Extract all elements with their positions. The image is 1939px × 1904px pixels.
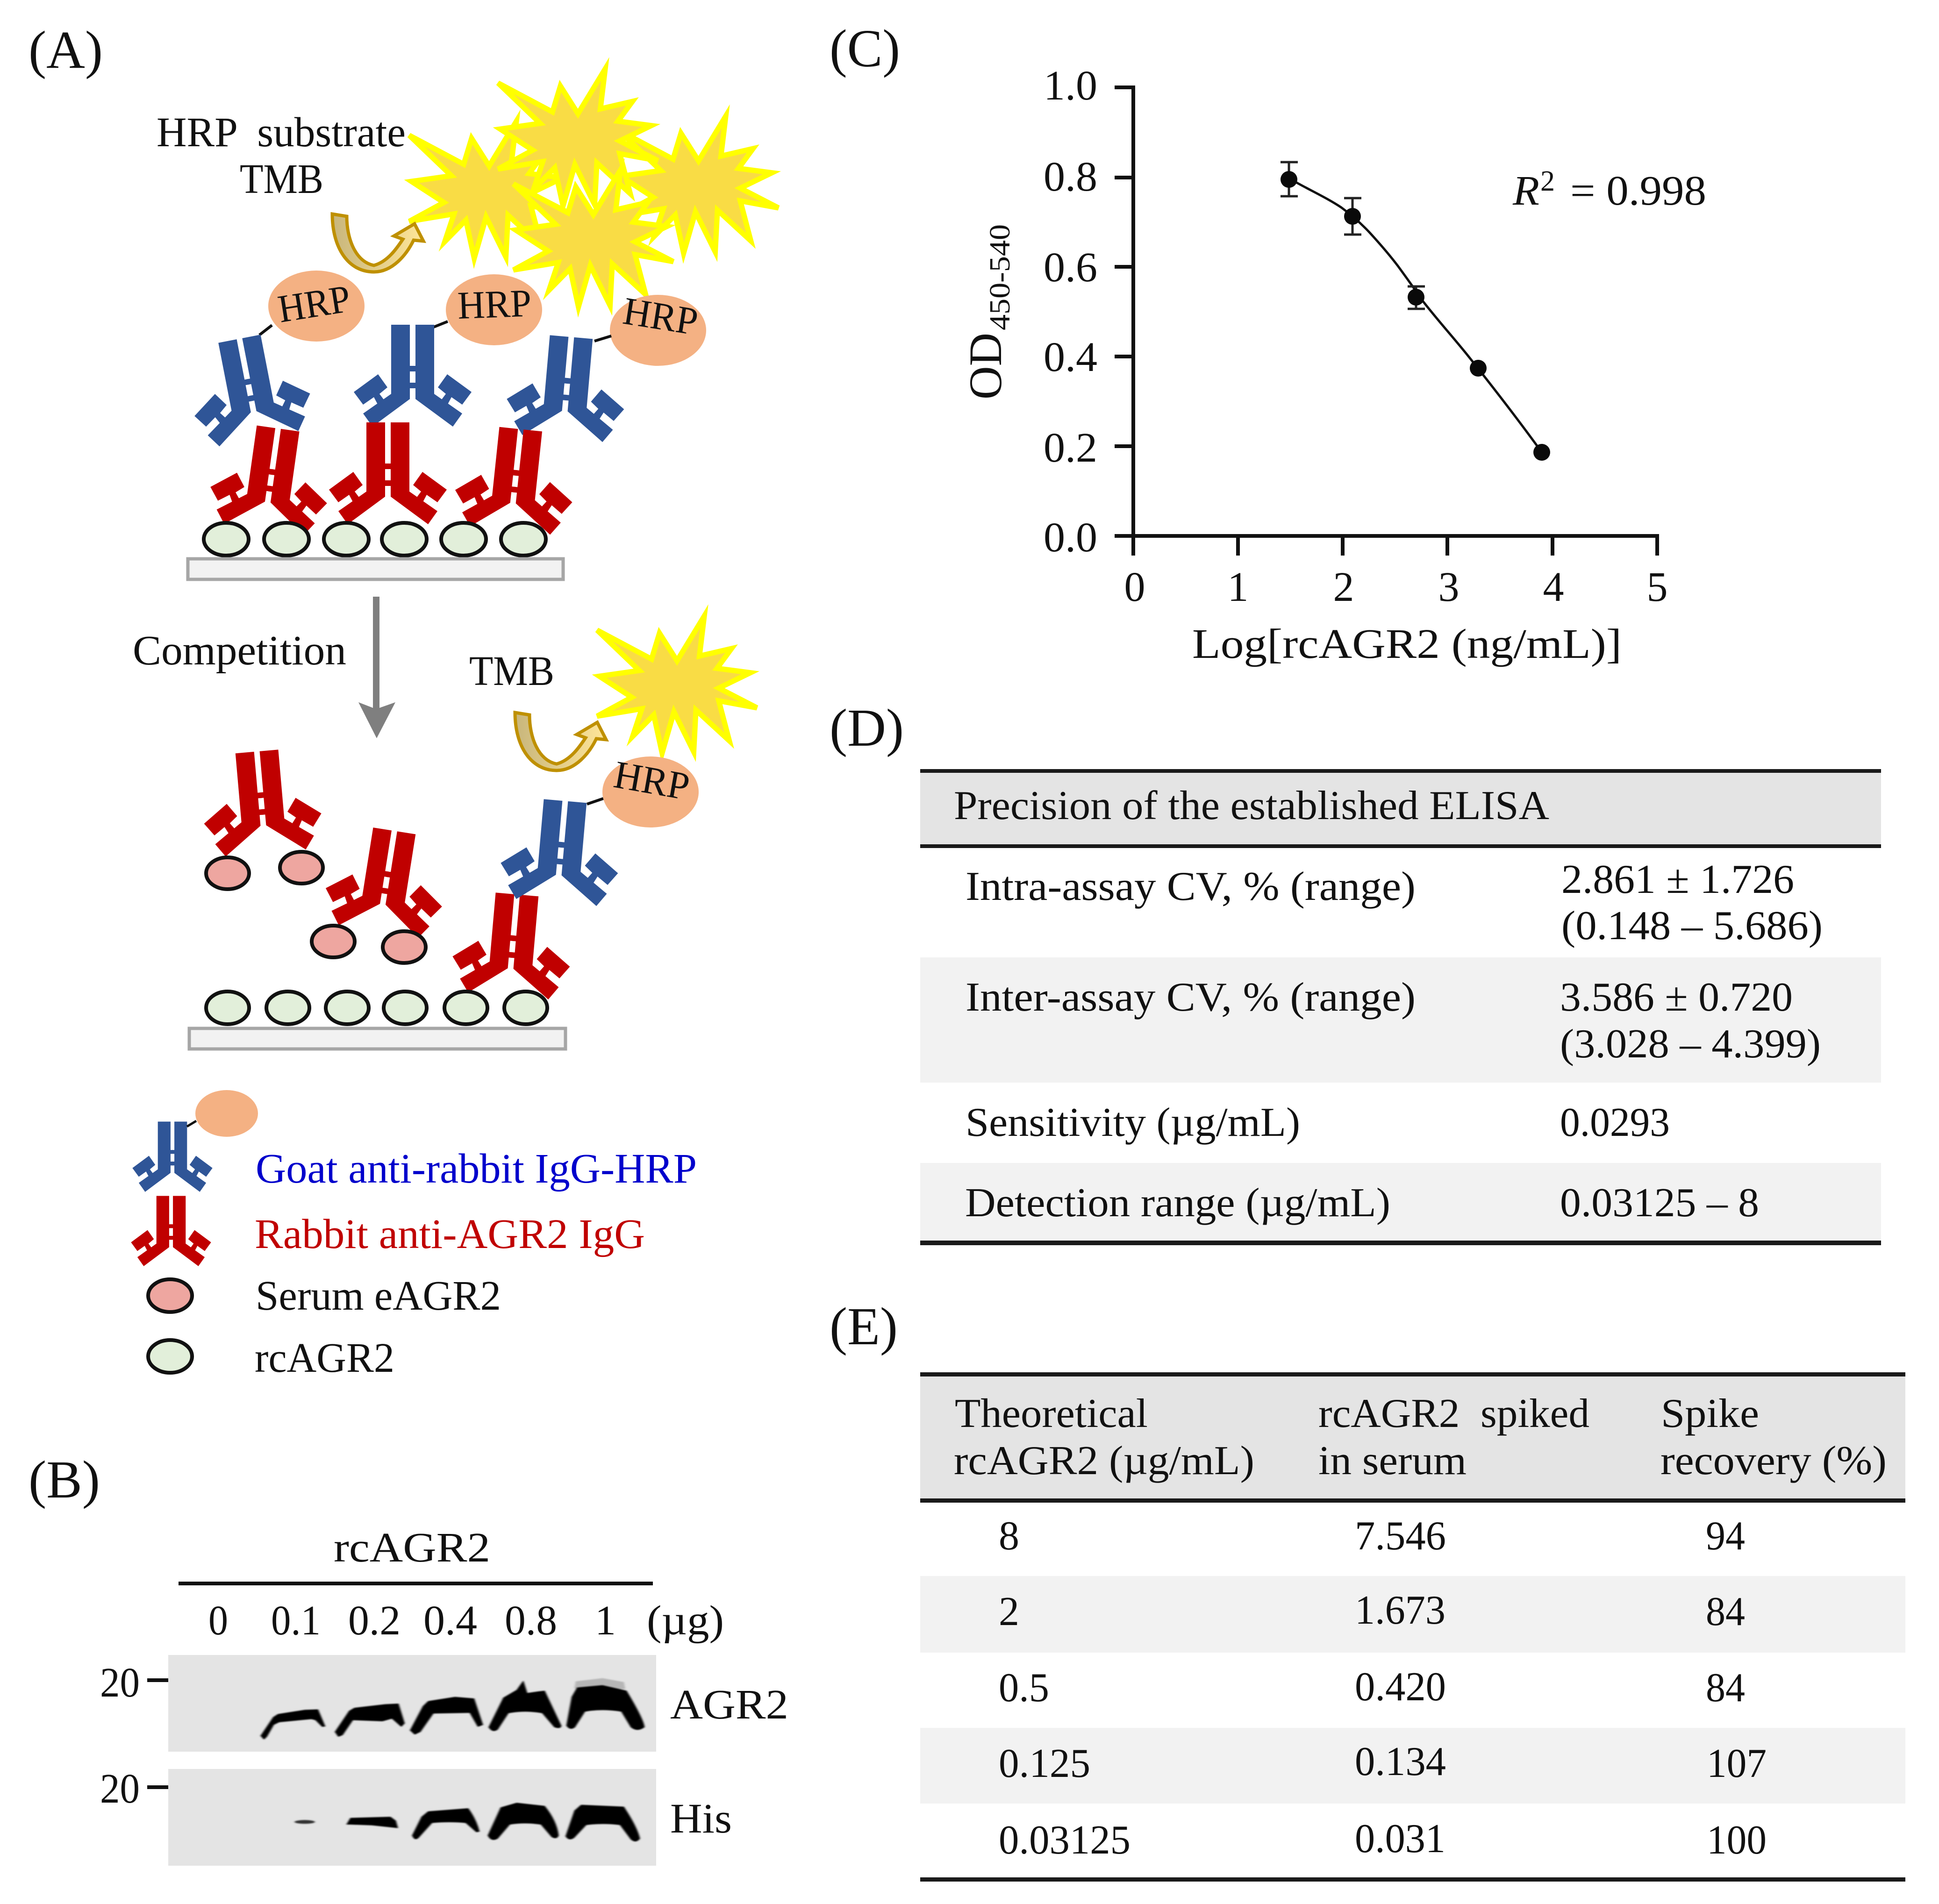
table backgrounds (920, 1375, 1905, 1804)
blot heading rcAGR2: rcAGR2 (334, 1525, 490, 1571)
row: inter-assay CV: Inter-assay CV, % (range) (966, 975, 1416, 1020)
row: inter-assay CV: (3.028 – 4.399) (1560, 1021, 1821, 1067)
R squared annotation (1512, 165, 1706, 214)
top assay: blue goat anti-rabbit antibodies (182, 325, 630, 450)
panel label C: (C) (830, 19, 900, 78)
legend (131, 1090, 697, 1381)
row: 8 (999, 1513, 1745, 1559)
fitted curve (1289, 179, 1542, 452)
header: spike recovery (1660, 1391, 1887, 1483)
row: 0.5: 0.5 (999, 1665, 1049, 1711)
panel B: western blot (29, 1450, 788, 1866)
lane labels: 0.8 (505, 1597, 557, 1644)
legend text: serum eAGR2: Serum eAGR2 (256, 1273, 501, 1319)
top assay: HRP conjugates: HRP (620, 289, 701, 344)
x-axis tick labels: 3 (1438, 564, 1459, 610)
y-axis tick labels: 0.2 (1044, 425, 1097, 471)
header: spike recovery: Spike (1661, 1391, 1759, 1436)
table rules (920, 769, 1881, 1245)
y-axis tick labels: 0.4 (1044, 334, 1097, 380)
row: intra-assay CV (966, 857, 1823, 948)
y-axis tick labels: 1.0 (1044, 63, 1097, 109)
y-axis title (959, 224, 1016, 399)
blot label His: His (670, 1796, 732, 1842)
panel label B: (B) (29, 1450, 100, 1509)
row: 0.125 (999, 1739, 1767, 1786)
row: inter-assay CV: 3.586 ± 0.720 (1560, 975, 1793, 1020)
bottom assay: coated rcAGR2 circles (206, 991, 547, 1024)
row: detection range (965, 1180, 1759, 1226)
R squared annotation: = 0.998 (1570, 168, 1706, 214)
bottom assay: blue antibody with HRP (498, 753, 699, 908)
lane labels: 0.4 (423, 1597, 477, 1644)
data points (1281, 171, 1550, 461)
label: second TMB: TMB (469, 648, 554, 694)
marker 20 lower (100, 1766, 168, 1812)
x-axis tick labels: 1 (1227, 564, 1249, 610)
lane labels: 0.1 (271, 1597, 321, 1644)
blot: His (168, 1769, 656, 1866)
row: detection range: Detection range (µg/mL) (965, 1180, 1390, 1226)
row: 0.03125 (999, 1816, 1767, 1863)
row: 8: 8 (999, 1513, 1019, 1559)
label: Competition: Competition (133, 628, 346, 674)
row: 0.5: 0.420 (1355, 1664, 1446, 1710)
lane labels: 0 (208, 1597, 228, 1644)
header: rcAGR2 spiked in serum: rcAGR2 spiked (1318, 1391, 1589, 1436)
y-axis title: 450-540 (984, 224, 1016, 330)
legend icon: goat antibody with HRP (132, 1090, 258, 1192)
table header: Precision of the established ELISA (954, 783, 1549, 828)
panel label A: (A) (29, 20, 103, 79)
panel label D: (D) (830, 698, 904, 757)
y-axis tick labels: 0.0 (1044, 514, 1097, 561)
row: 0.5 (999, 1664, 1745, 1711)
row: 0.03125: 100 (1707, 1818, 1767, 1863)
marker 20 lower: 20 (100, 1766, 140, 1812)
bottom assay: free antibodies bound to serum eAGR2 (198, 746, 576, 1001)
header: theoretical rcAGR2 (954, 1391, 1254, 1483)
header: spike recovery: recovery (%) (1660, 1438, 1887, 1483)
legend text: goat antibody: Goat anti-rabbit IgG-HRP (256, 1146, 697, 1192)
legend text: rabbit antibody: Rabbit anti-AGR2 IgG (255, 1211, 645, 1257)
bottom assay: blue antibody with HRP: HRP (611, 753, 693, 809)
R squared annotation: R (1512, 168, 1539, 214)
x-axis tick labels (1124, 564, 1667, 610)
R squared annotation: 2 (1540, 165, 1555, 197)
blot label AGR2: AGR2 (670, 1682, 788, 1728)
marker 20 upper: 20 (100, 1660, 140, 1706)
row: 0.125: 0.125 (999, 1741, 1090, 1786)
row: 0.03125: 0.031 (1355, 1816, 1445, 1861)
arrow: second substrate conversion (515, 713, 606, 770)
arrow: competition step (358, 597, 395, 738)
panel A: competitive ELISA schematic (29, 20, 779, 1381)
header: theoretical rcAGR2: Theoretical (955, 1391, 1148, 1436)
header: rcAGR2 spiked in serum (1318, 1391, 1589, 1483)
y-axis tick labels: 0.6 (1044, 244, 1097, 291)
top assay: HRP conjugates (259, 271, 706, 366)
panel label E: (E) (830, 1297, 898, 1356)
row: 0.125: 107 (1707, 1741, 1767, 1786)
table rules (920, 1372, 1905, 1882)
row: 8: 94 (1706, 1513, 1745, 1559)
bottom assay: plate surface (189, 1028, 565, 1049)
y-axis tick labels (1044, 63, 1097, 561)
row: 2: 84 (1706, 1589, 1745, 1634)
row: 2 (999, 1588, 1745, 1634)
row: inter-assay CV (966, 975, 1821, 1067)
panel D: precision table (830, 698, 1881, 1245)
panel E: spike recovery table (830, 1297, 1905, 1882)
label: HRP substrate: HRP substrate (157, 109, 406, 156)
row: sensitivity: Sensitivity (µg/mL) (966, 1100, 1300, 1145)
x-axis tick labels: 0 (1124, 564, 1145, 610)
x-axis tick labels: 5 (1647, 564, 1667, 610)
row: 2: 1.673 (1355, 1588, 1445, 1633)
legend icon: serum eAGR2 (148, 1279, 192, 1312)
header: rcAGR2 spiked in serum: in serum (1318, 1438, 1467, 1483)
x-axis tick labels: 4 (1543, 564, 1564, 610)
row: 0.03125: 0.03125 (999, 1818, 1130, 1863)
lane labels: (µg) (647, 1597, 724, 1644)
row: detection range: 0.03125 – 8 (1560, 1180, 1759, 1226)
top assay: plate surface (188, 559, 563, 579)
row: 8: 7.546 (1355, 1513, 1446, 1559)
row: sensitivity (966, 1100, 1670, 1145)
legend icon: rabbit antibody (131, 1196, 211, 1266)
header: theoretical rcAGR2: rcAGR2 (µg/mL) (954, 1438, 1254, 1483)
icon: single signal burst (597, 616, 757, 753)
x-axis title: Log[rcAGR2 (ng/mL)] (1192, 621, 1622, 667)
row: 2: 2 (999, 1589, 1019, 1634)
panel C: standard curve chart (830, 19, 1706, 667)
row: intra-assay CV: 2.861 ± 1.726 (1561, 857, 1794, 902)
y-axis tick labels: 0.8 (1044, 154, 1097, 200)
y-axis title: OD (959, 333, 1011, 399)
legend icon: rcAGR2 (148, 1340, 192, 1373)
table backgrounds (920, 771, 1881, 1240)
arrow: substrate conversion (332, 214, 423, 272)
legend text: rcAGR2: rcAGR2 (255, 1335, 394, 1381)
top assay: coated rcAGR2 circles (204, 523, 546, 556)
top assay: red rabbit antibodies (206, 421, 580, 537)
marker 20 upper (100, 1660, 168, 1706)
icon: four yellow signal bursts (409, 69, 779, 307)
chart axes (1115, 86, 1659, 556)
lane labels (208, 1597, 724, 1644)
error bars (1281, 162, 1425, 309)
row: intra-assay CV: (0.148 – 5.686) (1561, 903, 1823, 948)
blot: AGR2 (168, 1655, 656, 1752)
row: 0.125: 0.134 (1355, 1739, 1446, 1784)
lane labels: 1 (595, 1597, 616, 1644)
top assay: HRP conjugates: HRP (457, 282, 532, 328)
label: TMB: TMB (240, 156, 323, 202)
row: sensitivity: 0.0293 (1560, 1100, 1670, 1145)
x-axis tick labels: 2 (1333, 564, 1354, 610)
row: 0.5: 84 (1706, 1665, 1745, 1711)
row: intra-assay CV: Intra-assay CV, % (range) (966, 864, 1416, 909)
top assay: HRP conjugates: HRP (275, 277, 353, 331)
heading rule (179, 1582, 653, 1585)
lane labels: 0.2 (348, 1597, 401, 1644)
